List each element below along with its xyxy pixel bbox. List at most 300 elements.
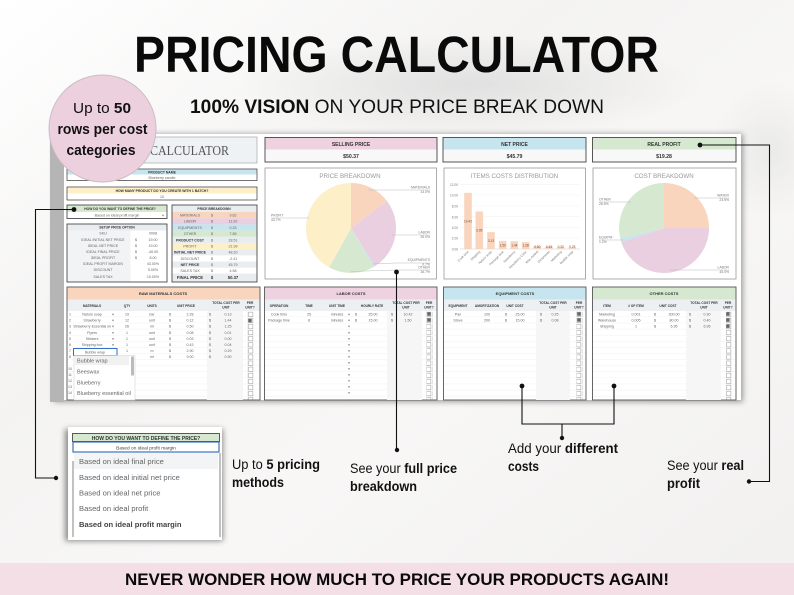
product name box: PRODUCT NAME [148,170,177,174]
table: raw materials costs: 9.00 [186,355,194,359]
bar chart: items costs distribution: 1.44 [511,244,518,248]
table: raw materials costs: 8 [69,355,71,359]
table: equipment costs: $ [540,312,542,316]
table: labor costs: TIME [305,304,313,308]
table: raw materials costs: ▾ [112,312,114,316]
pie chart: cost breakdown: WATER [717,194,730,198]
price breakdown table: 21.99 [228,244,238,248]
arrow: different costs bracket [520,384,616,440]
arrow: price breakdown [394,270,399,452]
table: raw materials costs: $ [209,349,211,353]
table: labor costs: 1.50 [404,319,412,323]
table: other costs: 0.005 [632,319,640,323]
title: PRICING CALCULATOR [134,26,659,83]
table: other costs: OTHER COSTS [650,291,679,296]
table: other costs: $ [689,325,691,329]
bar chart: items costs distribution: Shipping [470,250,481,261]
table: labor costs: $ [391,312,393,316]
table: equipment costs: Pan [455,312,461,316]
table: labor costs: $ [355,312,357,316]
dropdown: materials list: Blueberry [77,380,101,386]
price breakdown table: 4.58 [230,269,236,273]
table: equipment costs: 0.08 [552,319,558,323]
setup price option table: SALES TAX [93,275,113,279]
price breakdown table: $ [211,232,213,236]
pie chart: cost breakdown: 45.0% [719,270,729,274]
bar chart: items costs distribution: Bubble wrap [559,250,574,265]
table: raw materials costs: TOTAL COST PER [212,301,240,305]
price breakdown table: SALES TAX [180,269,200,273]
table: labor costs: PER [426,301,433,305]
text: up to 5 pricing methods: Up to 5 pricing [232,457,320,472]
table: equipment costs: 200 [484,319,490,323]
text: costs: costs [508,459,539,474]
table: other costs: $ [654,319,656,323]
table: labor costs: HOURLY RATE [361,304,383,308]
price breakdown table: MATERIALS [180,214,201,218]
text: methods: methods [232,475,284,490]
bar chart: items costs distribution: 12.00 [450,183,458,187]
table: raw materials costs: $ [209,319,211,323]
batch quantity box: 10 [160,195,164,199]
price breakdown table: EQUIPMENTS [178,226,202,230]
pie chart: cost breakdown: 1.2% [599,240,607,244]
pie chart: price breakdown: OTHER [418,266,431,270]
price breakdown table: PROFIT [183,244,197,248]
card: real profit [592,138,736,162]
dropdown: materials list: Beeswax [77,370,100,376]
table: raw materials costs: UNIT PRICE [177,304,195,308]
table: raw materials costs: Strawberry [83,319,101,323]
table: raw materials costs: $ [169,337,171,341]
table: other costs: ITEM [603,304,611,308]
callout bubble: up to 50 rows: Up to 50 [73,101,131,117]
define price box [67,205,167,218]
table: other costs: UNIT [700,306,708,310]
table: raw materials costs: 12 [68,379,72,383]
table: raw materials costs: $ [169,312,171,316]
table: raw materials costs: RAW MATERIALS COSTS [139,291,188,296]
table: other costs: 80.00 [670,319,678,323]
text: breakdown: breakdown [350,479,417,494]
setup price option table: SETUP PRICE OPTION [99,226,135,230]
pie chart: cost breakdown: 23.5% [719,198,729,202]
table: labor costs: LABOR COSTS [336,291,366,296]
table: equipment costs: TOTAL COST PER [539,301,567,305]
table: labor costs: ▾ [348,312,350,316]
table: raw materials costs: unit [149,343,155,347]
table: raw materials costs: 0.90 [224,355,232,359]
table: raw materials costs: 0.00 [224,337,232,341]
setup price option table: $ [135,250,137,254]
table: raw materials costs: 10 [68,367,72,371]
table: labor costs: ▾ [348,349,350,353]
pie chart: price breakdown: 26.0% [420,235,430,239]
setup price option table: IDEAL PROFIT [91,256,116,260]
table: raw materials costs: m [150,349,154,353]
setup price option table: DISCOUNT [94,268,113,272]
panel: spreadsheet dashboard [50,134,743,402]
table: labor costs: OPERATION [270,304,289,308]
price breakdown table: $ [211,275,214,280]
table: equipment costs: 25.00 [516,312,524,316]
table: other costs: $ [654,312,656,316]
table: raw materials costs: 4 [69,331,71,335]
callout bubble: up to 50 rows: categories [66,143,136,159]
setup price option table: $ [135,256,137,260]
table: raw materials costs: 1.44 [224,319,232,323]
text: add your different: Add your different [508,441,618,456]
table: labor costs: ▾ [348,355,350,359]
define price box: HOW DO YOU WANT TO DEFINE THE PRICE? [84,207,156,211]
price breakdown table: LABOR [184,220,196,224]
table: raw materials costs: 0.04 [224,343,232,347]
table: raw materials costs: 11 [68,373,72,377]
dropdown options: Based on ideal initial net price [79,473,180,482]
card: selling price: $50.37 [343,154,359,160]
table: raw materials costs: 1.25 [224,325,232,329]
table: labor costs: ▾ [348,367,350,371]
bar chart: items costs distribution [444,168,586,279]
price breakdown table: 28.51 [228,238,238,242]
setup price option table: -40.00 [148,250,158,254]
bar chart: items costs distribution: 3.13 [488,239,494,243]
setup price option table: 19.00 [148,244,158,248]
setup price option table: 10.00% [147,275,160,279]
table: labor costs: $ [355,319,357,323]
bar chart: items costs distribution: 1.50 [500,244,506,248]
dropdown options: Based on ideal profit [79,504,149,513]
bar chart: items costs distribution: 0.45 [546,245,552,249]
table: labor costs: Cook time [271,312,287,316]
table: raw materials costs: 2.28 [186,312,194,316]
panel: pricing method dropdown: HOW DO YOU WANT TO DEFINE THE PRICE? [92,436,200,442]
bar chart: items costs distribution: Strawberry Color [508,249,528,270]
table: labor costs: UNIT [402,306,410,310]
dropdown: materials list: Blueberry essential oil [77,391,131,397]
price breakdown table: 11.92 [229,220,237,224]
setup price option table: 5.00% [148,268,159,272]
card: net price: $45.79 [507,154,523,160]
table: equipment costs: 0.25 [552,312,558,316]
table: labor costs: TOTAL COST PER [392,301,420,305]
table: raw materials costs: ▾ [112,343,114,347]
arrow: real profit [698,143,770,484]
table: raw materials costs: $ [169,331,171,335]
table: other costs: PER [725,301,732,305]
batch quantity box [67,187,257,200]
price breakdown table [172,205,257,282]
table: raw materials costs: 26 [125,325,129,329]
pie chart: cost breakdown: EQUIPM [599,236,613,240]
table: labor costs: ▾ [348,361,350,365]
pie chart: price breakdown: 14.0% [420,190,430,194]
pie chart: cost breakdown [593,168,736,279]
table: raw materials costs: $ [169,355,171,359]
table: raw materials costs: ▾ [112,331,114,335]
price breakdown table: $ [211,226,213,230]
arrow: define price to pricing methods [36,207,76,480]
pie chart: price breakdown [265,168,436,279]
bar chart: items costs distribution: 0.30 [558,245,564,249]
bar chart: items costs distribution: Cook time [457,250,470,263]
table: labor costs: ▾ [348,331,350,335]
table: raw materials costs: PER [247,301,254,305]
pie chart: cost breakdown: 28.5% [599,202,609,206]
pie chart: price breakdown: PROFIT [271,214,283,218]
price breakdown table: $ [211,244,213,248]
table: raw materials costs: $ [169,349,171,353]
table: raw materials costs: unit [149,331,155,335]
card: real profit: REAL PROFIT [647,142,681,148]
table: other costs: 6.95 [704,325,710,329]
card: selling price [265,138,437,162]
dropdown: materials list [74,348,135,400]
price breakdown table: $ [211,269,213,273]
table: labor costs: Package time [268,319,290,323]
dropdown options: Based on ideal final price [79,457,164,466]
pie chart: cost breakdown: OTHER [599,198,611,202]
price breakdown table: $ [211,238,213,242]
table: labor costs: ▾ [348,343,350,347]
footer banner [0,563,794,595]
table: raw materials costs: 5 [69,337,71,341]
pie chart: cost breakdown: LABOR [718,266,730,270]
table: raw materials costs: Flyers [87,331,97,335]
table: other costs: Shipping [600,325,614,329]
price breakdown table: DISCOUNT [181,257,200,261]
table: raw materials costs: 1 [126,349,128,353]
pie chart: price breakdown: LABOR [418,230,431,234]
table: raw materials costs: 1 [126,343,128,347]
dropdown: materials list: Bubble wrap [77,358,108,364]
table: other costs: 0.30 [704,312,710,316]
setup price option table: 8.00 [150,256,156,260]
price breakdown table: FINAL PRICE [177,275,203,280]
table: equipment costs: PER [576,301,583,305]
table: labor costs: ▾ [348,379,350,383]
table: raw materials costs: MATERIALS [83,304,101,308]
table: labor costs: ▾ [348,391,350,395]
callout bubble: up to 50 rows: rows per cost [58,122,148,138]
price breakdown table: -2.41 [229,257,237,261]
bar chart: items costs distribution: 10.42 [464,220,472,224]
price breakdown table: 50.37 [228,275,239,280]
table: labor costs: $ [391,319,393,323]
table: equipment costs: $ [505,319,507,323]
price breakdown table: PRODUCT COST [176,238,205,242]
table: equipment costs: $ [540,319,542,323]
panel: pricing method dropdown: Based on ideal profit margin [116,446,176,452]
bar chart: items costs distribution: 0.00 [452,248,458,252]
price breakdown table: 45.79 [228,263,238,267]
table: raw materials costs: $ [209,343,211,347]
table: raw materials costs: unit [149,319,155,323]
text: see your full price: See your full price [350,461,457,476]
setup price option table: 0008 [149,232,157,236]
table: labor costs [264,287,437,400]
pie chart: price breakdown: EQUIPMENTS [408,258,431,262]
bar chart: items costs distribution: Marketing [550,250,563,263]
setup price option table [67,224,167,282]
bar chart: items costs distribution: Ornaments [537,250,551,264]
table: raw materials costs: 1 [69,312,71,316]
callout bubble: up to 50 rows [49,75,156,182]
table: other costs: 0.001 [632,312,640,316]
bar chart: items costs distribution: ITEMS COSTS DISTRIBUTION [471,173,558,180]
table: other costs: UNIT? [723,306,733,310]
bar chart: items costs distribution: 6.00 [452,215,458,219]
table: equipment costs: AMORTIZATION [475,304,500,308]
table: other costs: Marketing [599,312,615,316]
table: raw materials costs: ▾ [112,319,114,323]
table: raw materials costs: 7 [69,349,71,353]
table: raw materials costs: 2 [69,319,71,323]
table: raw materials costs: ▾ [112,337,114,341]
bar chart: items costs distribution: 0.50 [534,245,541,249]
price breakdown table: NET PRICE [181,263,200,267]
table: raw materials costs: $ [169,325,171,329]
table: raw materials costs: 1 [126,331,128,335]
subtitle: 100% VISION ON YOUR PRICE BREAK DOWN [190,96,604,118]
dropdown options [79,457,182,529]
setup price option table: SKU [99,232,107,236]
table: labor costs: 10.42 [404,312,412,316]
price breakdown table: $ [211,251,213,255]
table: other costs: Warehouse [598,319,616,323]
bar chart: items costs distribution: Strawberry [502,250,516,264]
table: equipment costs: $ [505,312,507,316]
table: raw materials costs: UNIT [222,306,230,310]
table: equipment costs [444,287,586,400]
table: raw materials costs: 0.43 [186,343,194,347]
price breakdown table: 48.20 [228,251,238,255]
setup price option table: 43.00% [147,262,160,266]
card: net price: NET PRICE [501,142,528,148]
table: labor costs: ▾ [348,319,350,323]
table: raw materials costs: 0.13 [224,312,232,316]
table: raw materials costs: 0.12 [186,319,194,323]
setup price option table: $ [135,244,137,248]
pie chart: price breakdown: 0.7% [422,262,430,266]
table: raw materials costs: 0.03 [186,337,194,341]
define price box: Based on ideal profit margin [95,214,139,218]
table: raw materials costs: $ [169,319,171,323]
table: raw materials costs: bar [149,312,155,316]
bar chart: items costs distribution: 0.25 [569,245,576,249]
table: raw materials costs: $ [209,325,211,329]
setup price option table: IDEAL FINAL PRICE [86,250,120,254]
table: labor costs: 8 [308,319,310,323]
price breakdown table: OTHER [184,232,197,236]
table: raw materials costs: Strawberry Essential oil [73,325,111,329]
pie chart: price breakdown: 43.7% [271,218,281,222]
price breakdown table: 0.33 [230,226,236,230]
panel: pricing method dropdown [65,427,223,541]
bar chart: items costs distribution: 10.00 [450,194,458,198]
table: raw materials costs: $ [169,343,171,347]
table: equipment costs: UNIT? [574,306,584,310]
table: raw materials costs: 0.29 [224,349,232,353]
table: other costs: 6.95 [670,325,678,329]
table: raw materials costs: 0.01 [224,331,232,335]
table: raw materials costs: 0.50 [186,325,194,329]
price breakdown table: $ [211,220,213,224]
table: raw materials costs: 19 [125,312,129,316]
price breakdown table: $ [211,257,213,261]
bar chart: items costs distribution: 6.95 [476,228,483,232]
table: raw materials costs: $ [209,355,211,359]
table: raw materials costs: UNIT? [245,306,255,310]
table: raw materials costs: 13 [68,385,72,389]
table: raw materials costs: ▾ [112,325,114,329]
table: raw materials costs: $ [209,337,211,341]
table: other costs: $ [654,325,656,329]
table: raw materials costs [67,287,260,400]
table: raw materials costs: unit [149,337,155,341]
product name box: Blueberry candle [149,176,175,180]
table: other costs: UNIT COST [659,304,677,308]
table: other costs: TOTAL COST PER [690,301,718,305]
table: raw materials costs: UNITS [147,304,157,308]
table: equipment costs: EQUIPMENT COSTS [496,291,535,296]
pie chart: price breakdown: MATERIALS [411,186,431,190]
bar chart: items costs distribution: 4.00 [452,226,458,230]
table: raw materials costs: ml [150,325,154,329]
table: labor costs: 25.00 [368,312,378,316]
table: equipment costs: EQUIPMENT [449,304,468,308]
setup price option table: 19.00 [148,238,158,242]
table: raw materials costs: 12 [125,319,129,323]
table: other costs: 300.00 [668,312,680,316]
price breakdown table: $ [211,263,213,267]
table: equipment costs: UNIT COST [506,304,524,308]
dropdown: materials list: Bubble wrap [85,350,105,354]
bar chart: items costs distribution: 2.00 [452,237,458,241]
price breakdown table: PRICE BREAKDOWN [197,207,231,211]
table: other costs: 0.40 [704,319,710,323]
pie chart: cost breakdown: COST BREAKDOWN [634,173,694,180]
setup price option table: IDEAL INITIAL NET PRICE [81,238,125,242]
price breakdown table: INITIAL NET PRICE [174,251,207,255]
bar chart: items costs distribution: 1.28 [523,244,529,248]
bar chart: items costs distribution: 8.00 [452,205,458,209]
card: real profit: $19.28 [656,154,672,160]
table: raw materials costs: Nature soap [82,312,102,316]
table: other costs: $ [689,312,691,316]
table: raw materials costs: Shipping box [82,343,103,347]
define price box: ▾ [162,214,164,218]
price breakdown table: $ [211,214,213,218]
table: equipment costs: 15.00 [516,319,524,323]
table: labor costs: ▾ [348,337,350,341]
bar chart: items costs distribution: Wax melted [525,250,539,265]
footer banner: NEVER WONDER HOW MUCH TO PRICE YOUR PRODUCTS AGAIN! [125,570,669,589]
table: raw materials costs: 3 [69,325,71,329]
price breakdown table: 9.82 [230,214,236,218]
table: raw materials costs: 14 [68,391,72,395]
table: labor costs: minutes [331,319,343,323]
table: raw materials costs: 6 [69,343,71,347]
setup price option table: $ [135,238,137,242]
table: raw materials costs: $ [209,331,211,335]
setup price option table: IDEAL PROFIT MARGIN [83,262,123,266]
pie chart: price breakdown: 16.7% [420,270,430,274]
product name box [67,169,257,180]
calculator title box: CALCULATOR [150,144,230,159]
table: labor costs: ▾ [348,325,350,329]
table: equipment costs: 100 [484,312,490,316]
